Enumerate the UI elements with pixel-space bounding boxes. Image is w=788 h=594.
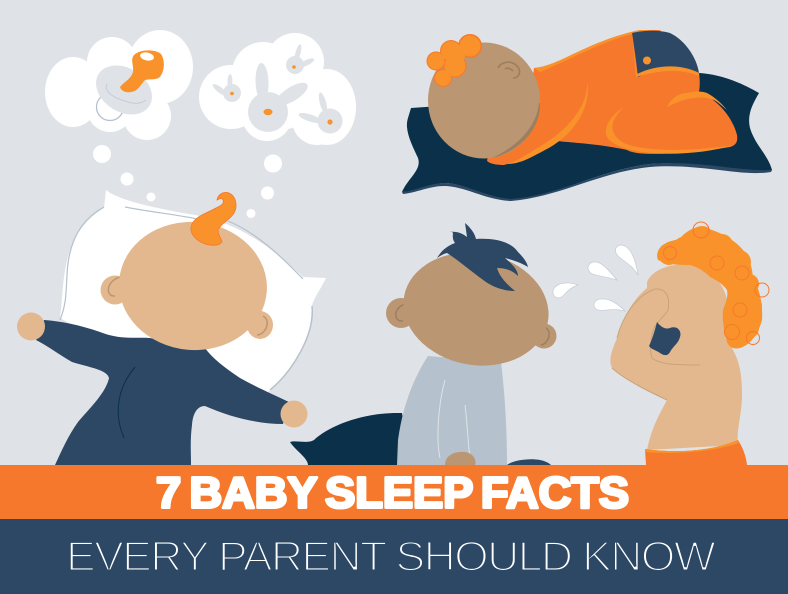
diaper bbox=[632, 31, 699, 77]
head bbox=[394, 241, 558, 377]
curly hair bbox=[657, 222, 769, 348]
arm and fist bbox=[612, 289, 700, 400]
hair curl bbox=[191, 192, 236, 245]
ear bbox=[498, 62, 520, 78]
tears bbox=[553, 245, 638, 311]
hand bbox=[445, 452, 476, 465]
pillow bbox=[60, 190, 326, 392]
grey body bbox=[397, 356, 507, 465]
title: 7 BABY SLEEP FACTS bbox=[156, 470, 629, 518]
navy bib bbox=[649, 322, 681, 355]
orange sleeper bbox=[487, 30, 737, 165]
body: navy sleeper bbox=[36, 320, 289, 465]
thought bubbles bbox=[93, 145, 282, 218]
icon: pacifier bbox=[87, 50, 164, 125]
icon: bunnies bbox=[211, 44, 342, 134]
banner: navy subtitle band bbox=[0, 519, 788, 594]
head bbox=[114, 216, 272, 356]
thought cloud: pacifier bbox=[45, 30, 193, 140]
hands bbox=[17, 312, 45, 340]
blanket bbox=[402, 73, 772, 200]
hair bbox=[437, 223, 528, 291]
crying baby with curly hair bbox=[610, 222, 769, 465]
foot bbox=[507, 459, 551, 465]
sleeping baby on blanket bbox=[402, 30, 772, 201]
baby stretching on pillow bbox=[17, 190, 326, 465]
dark pillow bbox=[290, 413, 410, 465]
orange pants bbox=[645, 440, 747, 465]
ears bbox=[386, 298, 416, 328]
thought cloud: bunnies bbox=[199, 33, 356, 145]
baby sitting in grey pyjamas bbox=[290, 223, 558, 465]
hair bbox=[426, 34, 482, 87]
banner: orange title band bbox=[0, 465, 788, 519]
torso and head bbox=[610, 264, 742, 450]
head bbox=[428, 42, 540, 158]
subtitle: EVERY PARENT SHOULD KNOW bbox=[66, 534, 716, 580]
ears bbox=[100, 276, 273, 339]
